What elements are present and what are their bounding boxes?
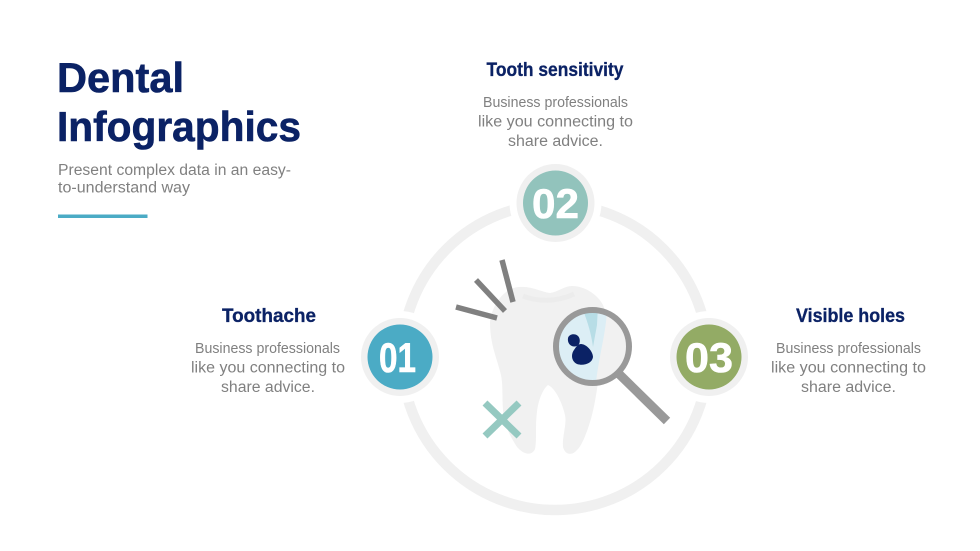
text block: toothache: like you connecting to: [191, 360, 345, 376]
text block: tooth sensitivity: Tooth sensitivity: [486, 60, 624, 81]
node 03: 03: [685, 334, 733, 381]
text block: visible holes: like you connecting to: [771, 360, 926, 376]
text block: toothache: share advice.: [221, 379, 315, 396]
node 02: 02: [532, 180, 579, 227]
text block: tooth sensitivity: Business professionals: [483, 95, 628, 111]
text block: visible holes: Visible holes: [796, 306, 905, 327]
illustration: tooth: [490, 286, 607, 454]
node 03: [663, 311, 755, 403]
node 01: 01: [379, 334, 416, 381]
icon: pain lines: [456, 260, 513, 318]
subtitle: [58, 162, 291, 196]
text block: toothache: Toothache: [222, 306, 316, 327]
text block: tooth sensitivity: like you connecting to: [478, 114, 633, 130]
node 01: [354, 311, 446, 403]
text block: toothache: [191, 306, 345, 396]
title: Dental: [57, 54, 184, 101]
subtitle: to-understand way: [58, 180, 190, 196]
text block: visible holes: Business professionals: [776, 341, 921, 357]
title accent line: [58, 214, 148, 218]
title: Infographics: [57, 103, 301, 150]
node 02: [510, 157, 602, 249]
icon: teal cross: [485, 403, 519, 436]
text block: visible holes: [771, 306, 926, 396]
text block: toothache: Business professionals: [195, 341, 340, 357]
subtitle: Present complex data in an easy-: [58, 162, 291, 179]
text block: tooth sensitivity: [478, 60, 633, 150]
ring: [402, 204, 708, 510]
title: [57, 54, 301, 150]
icon: magnifying glass: [550, 305, 667, 421]
text block: visible holes: share advice.: [801, 379, 896, 396]
text block: tooth sensitivity: share advice.: [508, 133, 603, 150]
